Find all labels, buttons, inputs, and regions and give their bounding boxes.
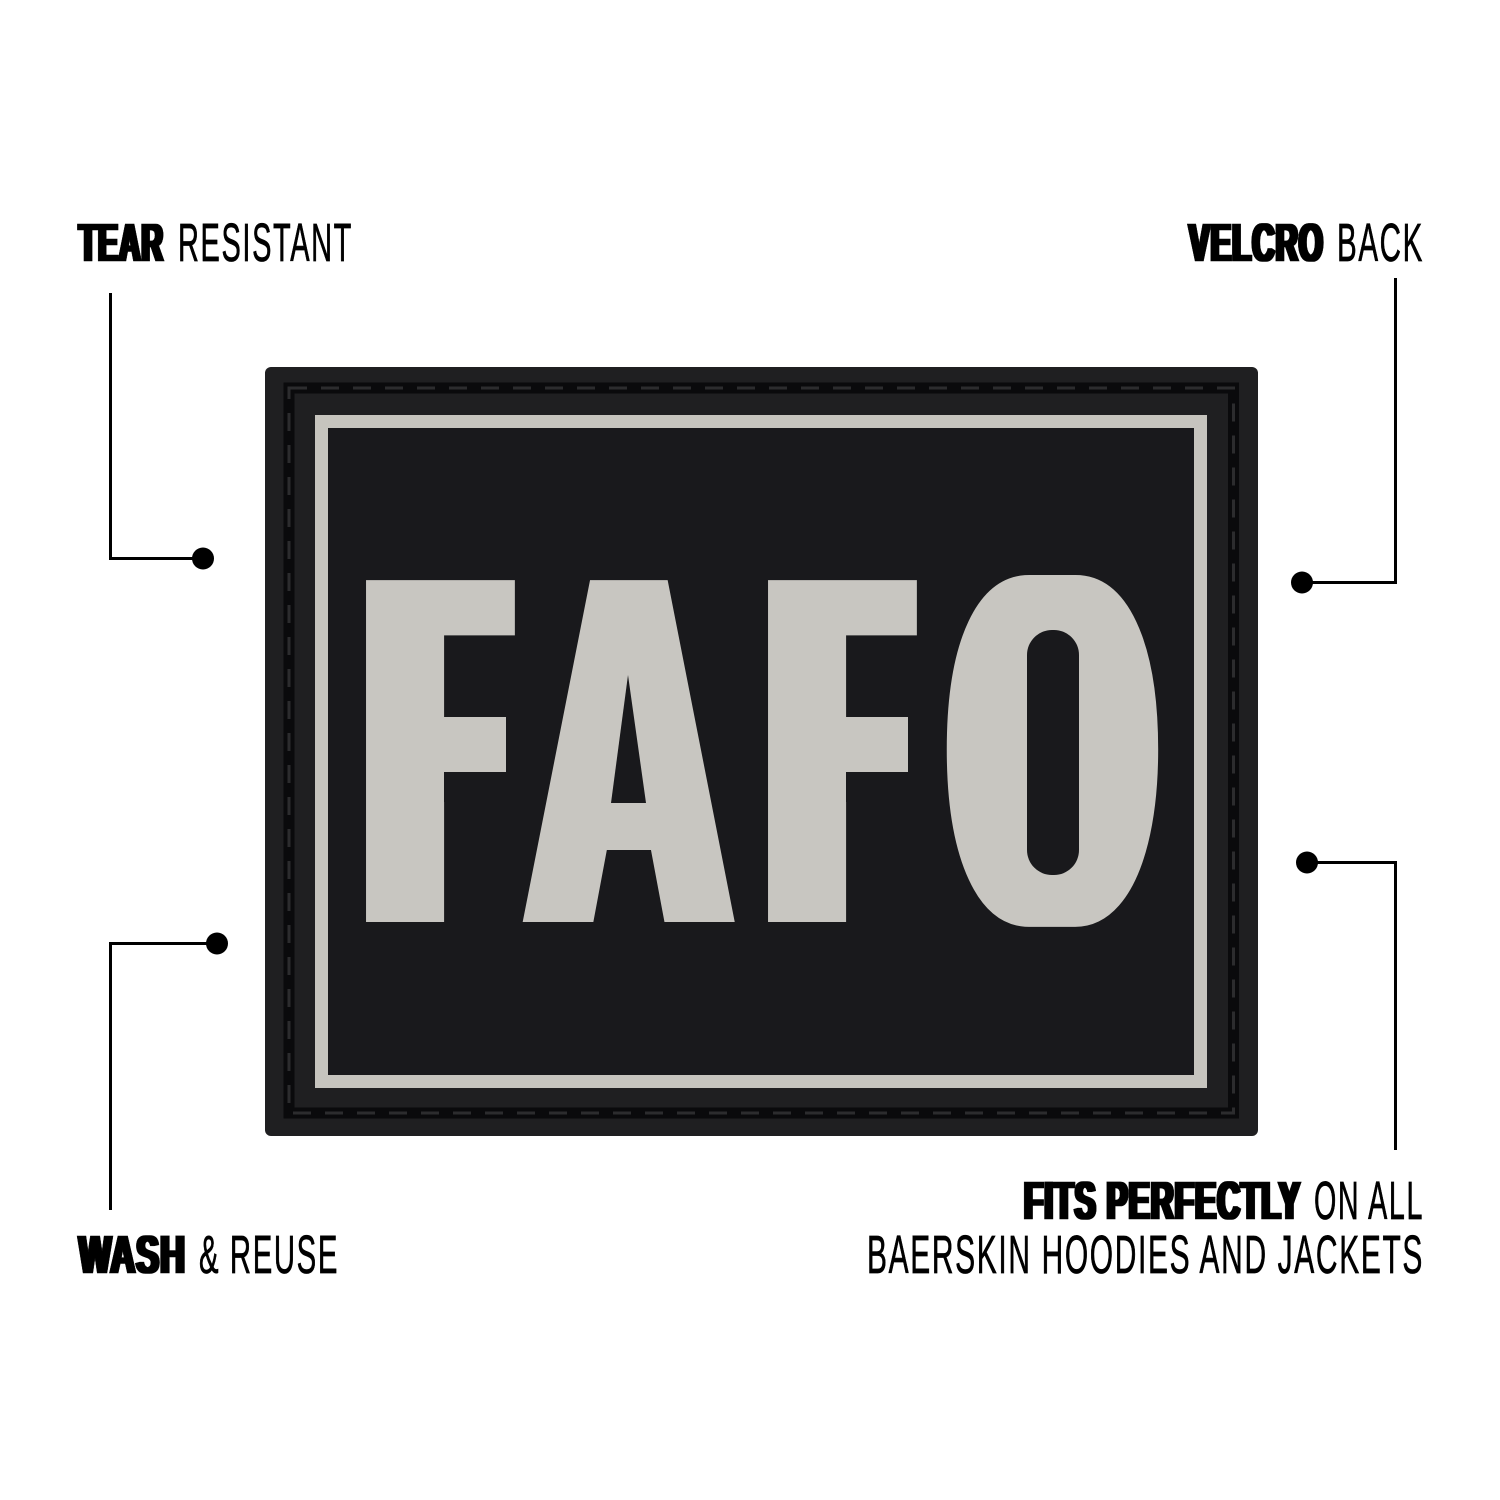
FAFO lettering: F: [378, 472, 497, 1027]
label: & REUSE: [199, 1225, 339, 1285]
patch base: [265, 367, 1258, 1136]
label: VELCRO: [1189, 213, 1324, 273]
dot: [1296, 852, 1318, 874]
FAFO lettering: F: [780, 472, 899, 1027]
label: TEAR: [79, 213, 164, 273]
label: [79, 213, 353, 273]
label: BACK: [1337, 213, 1424, 273]
dot: [192, 548, 214, 570]
callout: wash and reuse: [79, 932, 339, 1285]
FAFO lettering: [378, 472, 1145, 1028]
FAFO lettering: A: [532, 472, 726, 1028]
dot: [206, 932, 228, 954]
label: FITS PERFECTLY: [1024, 1171, 1301, 1231]
FAFO lettering: O: [960, 472, 1145, 1028]
label: [79, 1225, 339, 1285]
leader line: [110, 293, 203, 558]
dot: [1291, 572, 1313, 594]
leader line: [1307, 862, 1396, 1150]
callout: fits perfectly: [867, 852, 1424, 1285]
leader line: [110, 944, 217, 1210]
callout: tear resistant: [79, 213, 353, 570]
stitched groove: [289, 388, 1234, 1113]
label: WASH: [79, 1225, 186, 1285]
label: [867, 1171, 1424, 1285]
light border frame: [322, 422, 1200, 1082]
callout: velcro back: [1189, 213, 1424, 594]
label: RESISTANT: [178, 213, 353, 273]
leader line: [1302, 278, 1396, 582]
patch: [265, 367, 1258, 1136]
